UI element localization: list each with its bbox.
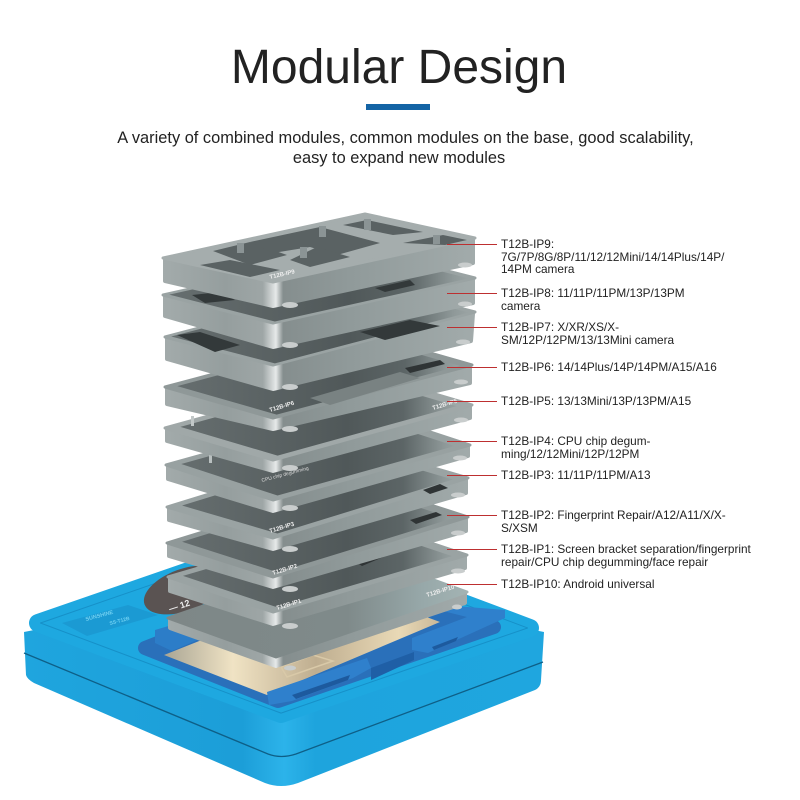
logo plate: SS-T12B bbox=[109, 616, 131, 627]
engraved label: CPU chip degumming bbox=[261, 465, 310, 484]
engraved label: T12B-IP6 bbox=[269, 400, 296, 414]
engraved label: T12B-IP2 bbox=[272, 563, 299, 577]
logo plate: SUNSHINE bbox=[85, 610, 114, 623]
logo plate bbox=[62, 605, 158, 636]
label IP3: T12B-IP3: 11/11P/11PM/A13 bbox=[501, 468, 651, 482]
label IP4: T12B-IP4: CPU chip degum- bbox=[501, 434, 651, 448]
base seam bbox=[24, 653, 543, 756]
plate T12B-IP8 bbox=[163, 250, 475, 348]
dial marks: — 12 bbox=[168, 598, 191, 614]
label IP2: T12B-IP2: Fingerprint Repair/A12/A11/X/X- bbox=[501, 508, 726, 522]
title: Modular Design bbox=[231, 41, 567, 94]
plate T12B-IP6 bbox=[165, 334, 472, 432]
subtitle: A variety of combined modules, common modules on the base, good scalability, bbox=[117, 129, 694, 147]
plate T12B-IP10 bbox=[168, 553, 467, 670]
plate T12B-IP3 bbox=[167, 447, 468, 552]
subtitle: easy to expand new modules bbox=[293, 149, 505, 167]
base top surface bbox=[38, 537, 530, 714]
engraved label: T12B-IP5 bbox=[432, 398, 459, 412]
cavity bbox=[145, 583, 494, 701]
plate T12B-IP9 bbox=[163, 214, 475, 308]
leader lines bbox=[447, 244, 497, 584]
front slider bbox=[267, 658, 371, 705]
triangle mark bbox=[281, 655, 333, 677]
right slider bbox=[412, 606, 505, 653]
rail bbox=[371, 652, 414, 680]
engraved label: T12B-IP10 bbox=[426, 584, 456, 599]
base dark dial bbox=[137, 556, 231, 624]
label IP7: T12B-IP7: X/XR/XS/X- bbox=[501, 320, 619, 334]
label IP6: T12B-IP6: 14/14Plus/14P/14PM/A15/A16 bbox=[501, 360, 717, 374]
plate T12B-IP4 bbox=[166, 410, 470, 511]
label IP8: camera bbox=[501, 299, 541, 313]
label IP4: ming/12/12Mini/12P/12PM bbox=[501, 447, 639, 461]
gold heating plate bbox=[164, 585, 440, 695]
accent bar bbox=[366, 104, 430, 110]
base body bbox=[24, 580, 544, 786]
label IP1: T12B-IP1: Screen bracket separation/fingerprint bbox=[501, 542, 752, 556]
engraved label: T12B-IP3 bbox=[269, 521, 296, 535]
label IP9: 14PM camera bbox=[501, 262, 575, 276]
plate T12B-IP7 bbox=[165, 284, 475, 390]
label IP5: T12B-IP5: 13/13Mini/13P/13PM/A15 bbox=[501, 394, 692, 408]
engraved label: T12B-IP1 bbox=[276, 598, 303, 612]
label IP7: SM/12P/12PM/13/13Mini camera bbox=[501, 333, 675, 347]
label IP9: T12B-IP9: bbox=[501, 237, 554, 251]
engraved label: T12B-IP9 bbox=[269, 269, 296, 281]
label IP1: repair/CPU chip degumming/face repair bbox=[501, 555, 708, 569]
blue base station bbox=[24, 537, 544, 786]
camera pockets bbox=[200, 220, 467, 277]
plate T12B-IP2 bbox=[167, 483, 468, 592]
label IP10: T12B-IP10: Android universal bbox=[501, 577, 654, 591]
plate T12B-IP5 bbox=[165, 373, 472, 471]
label IP2: S/XSM bbox=[501, 521, 538, 535]
left slider tab bbox=[155, 625, 202, 651]
pocket posts bbox=[237, 219, 440, 258]
label IP9: 7G/7P/8G/8P/11/12/12Mini/14/14Plus/14P/ bbox=[501, 250, 725, 264]
plate T12B-IP1 bbox=[168, 520, 467, 629]
label IP8: T12B-IP8: 11/11P/11PM/13P/13PM bbox=[501, 286, 685, 300]
